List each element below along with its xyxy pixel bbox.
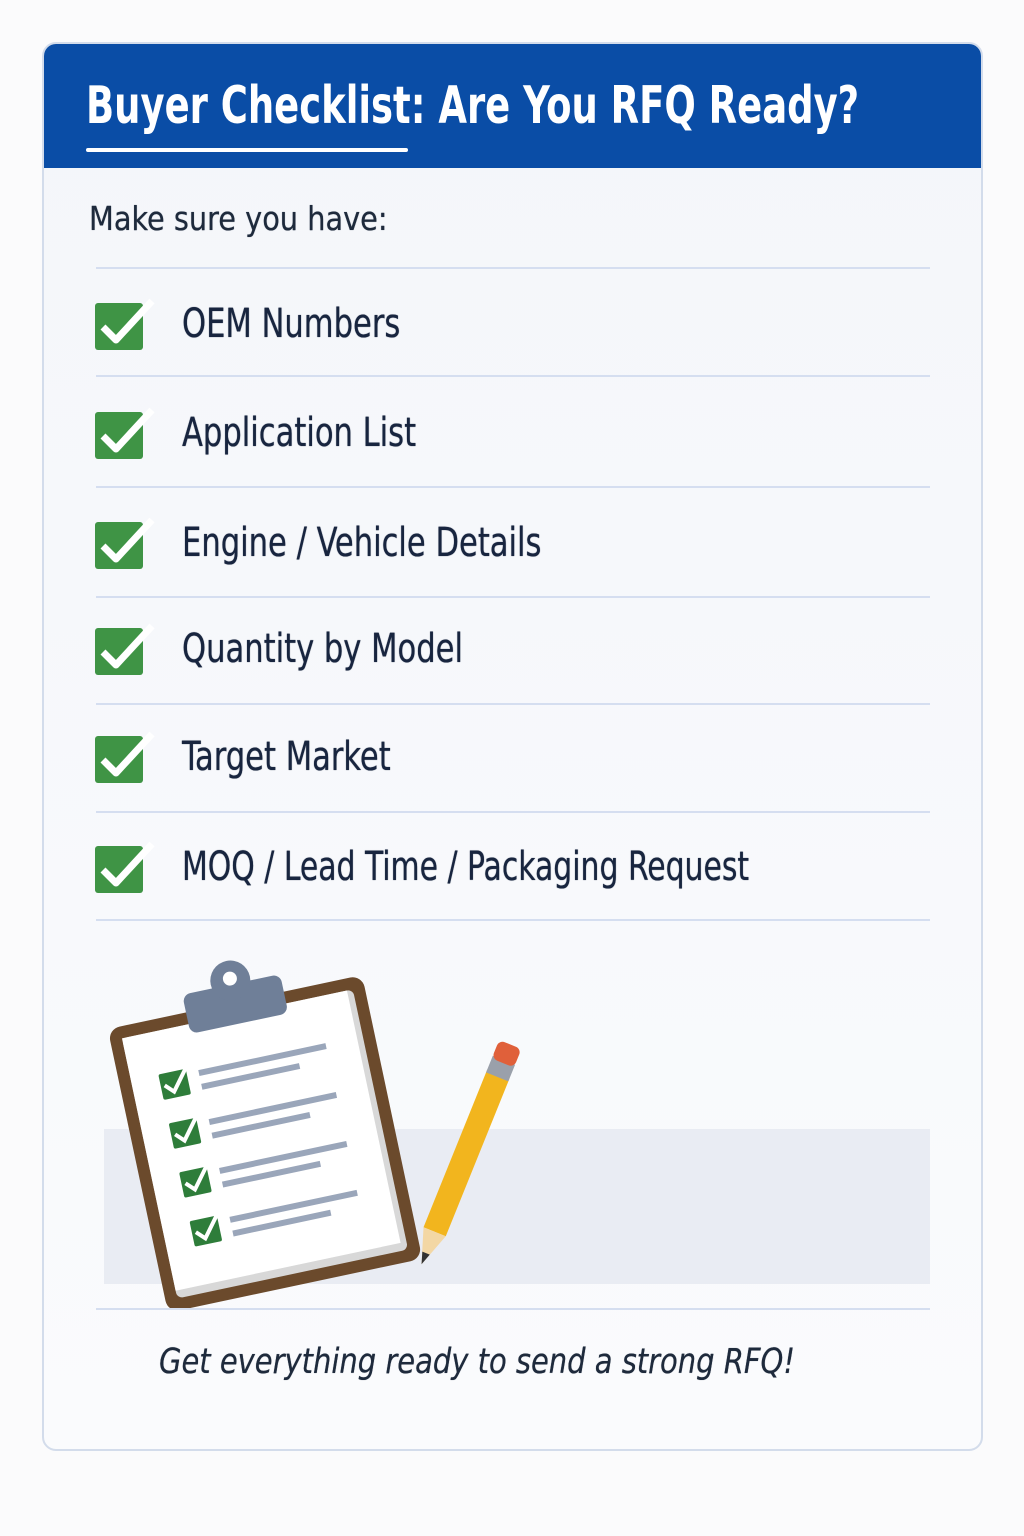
item: OEM: OEM Numbers: [182, 301, 400, 347]
item: application: [95, 408, 416, 459]
item: MOQ: MOQ / Lead Time / Packaging Request: [182, 844, 749, 890]
item: engine: Engine / Vehicle Details: [182, 520, 541, 566]
item: application: Application List: [182, 410, 416, 456]
item: quantity: [95, 624, 463, 675]
header: [44, 44, 981, 168]
subtitle: Make sure you have:: [89, 199, 388, 238]
item: OEM: [95, 299, 400, 350]
item: target market: [95, 733, 391, 783]
title: Buyer Checklist: Are You RFQ Ready?: [86, 76, 859, 136]
illustration: clipboard and pencil: [110, 960, 520, 1308]
item: target market: Target Market: [182, 734, 391, 780]
item: quantity: Quantity by Model: [182, 626, 463, 672]
footer tagline: Get everything ready to send a strong RFQ!: [159, 1342, 795, 1382]
gray band: [104, 1129, 930, 1284]
